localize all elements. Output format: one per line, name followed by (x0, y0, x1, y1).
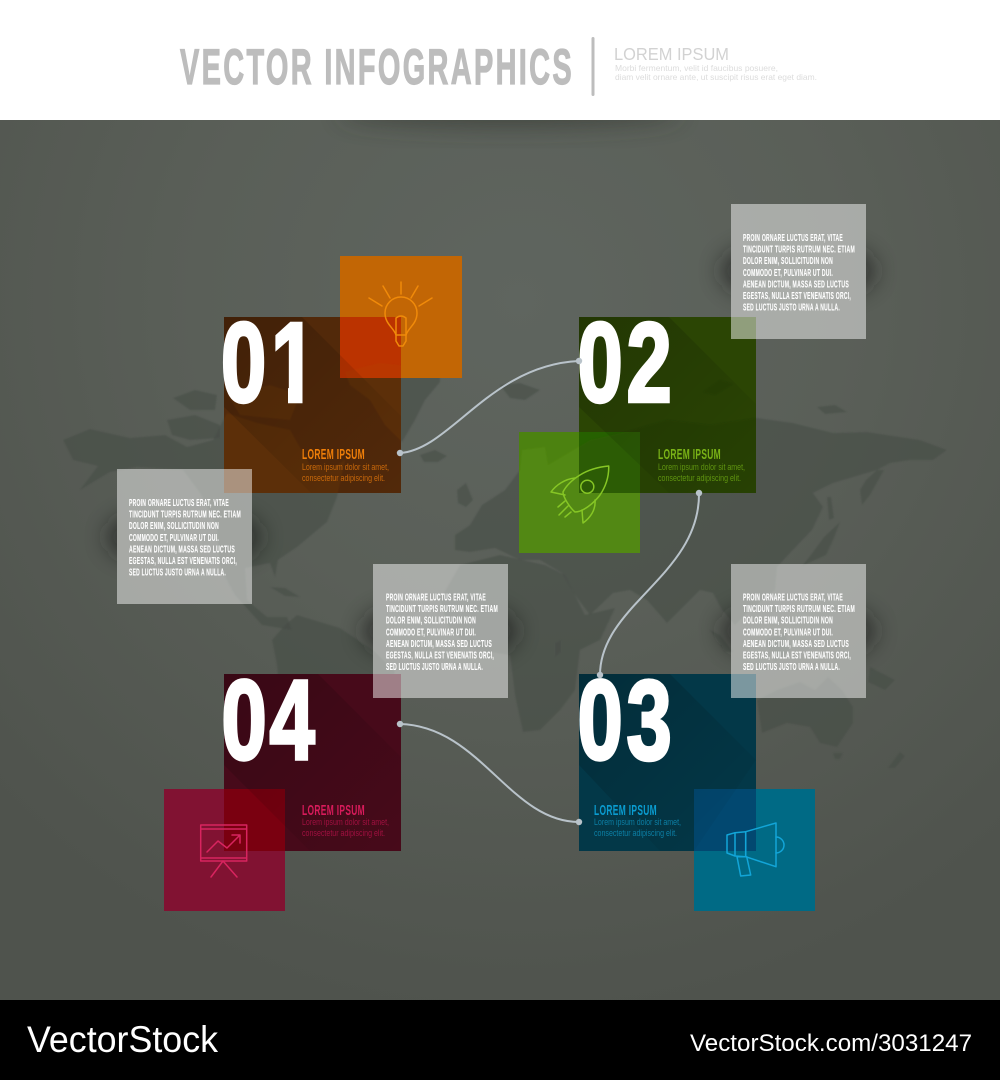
note box: left: PROIN ORNARE LUCTUS ERAT, VITAE (129, 498, 229, 509)
note box: lower right: TINCIDUNT TURPIS RUTRUM NEC. ETIAM (743, 604, 855, 615)
note box: top right: TINCIDUNT TURPIS RUTRUM NEC. ETIAM (743, 245, 855, 256)
note box: top right: DOLOR ENIM, SOLLICITUDIN NON (743, 256, 833, 267)
text 03: Lorem ipsum dolor sit amet, (594, 817, 681, 827)
note box: left (117, 469, 252, 604)
note box: left: SED LUCTUS JUSTO URNA A NULLA. (129, 568, 226, 579)
note box: left: EGESTAS, NULLA EST VENENATIS ORCI, (129, 556, 237, 567)
note box: lower right: PROIN ORNARE LUCTUS ERAT, VITAE (743, 592, 843, 604)
title: VECTOR INFOGRAPHICS (180, 39, 574, 95)
note box: center: EGESTAS, NULLA EST VENENATIS ORCI, (386, 650, 494, 662)
panel: step 03 (578, 657, 815, 911)
note box: lower right: SED LUCTUS JUSTO URNA A NULLA. (743, 662, 840, 673)
world map (63, 363, 947, 800)
note box: top right: AENEAN DICTUM, MASSA SED LUCTUS (743, 279, 849, 290)
text 01 (302, 462, 389, 483)
note box: lower right: COMMODO ET, PULVINAR UT DUI. (743, 627, 833, 638)
icon: presentation chart (201, 825, 247, 877)
note box: left: COMMODO ET, PULVINAR UT DUI. (129, 533, 219, 544)
text 02: Lorem ipsum dolor sit amet, (658, 462, 745, 472)
number 01: 01 (221, 299, 321, 426)
panel: step 04 (164, 657, 401, 911)
note box: lower right: AENEAN DICTUM, MASSA SED LUCTUS (743, 639, 849, 650)
note box: center: COMMODO ET, PULVINAR UT DUI. (386, 627, 476, 638)
panel: step 01 (222, 256, 462, 493)
note box: center: DOLOR ENIM, SOLLICITUDIN NON (386, 616, 476, 627)
connector: 02 to 03 (597, 490, 702, 678)
text 04 (302, 817, 389, 838)
panel: step 02 (519, 317, 756, 553)
note box: top right: EGESTAS, NULLA EST VENENATIS ORCI, (743, 291, 851, 302)
header subtitle: LOREM IPSUM (614, 44, 729, 64)
icon: rocket (551, 466, 609, 523)
text 01: consectetur adipiscing elit. (302, 473, 385, 483)
text 03 (594, 817, 681, 838)
text 01: Lorem ipsum dolor sit amet, (302, 462, 389, 472)
header description (615, 63, 817, 82)
note box: center: PROIN ORNARE LUCTUS ERAT, VITAE (386, 592, 486, 604)
note box: top right (731, 204, 866, 339)
note box: lower right: EGESTAS, NULLA EST VENENATIS ORCI, (743, 650, 851, 662)
note box: center: TINCIDUNT TURPIS RUTRUM NEC. ETIAM (386, 604, 498, 615)
heading 03: LOREM IPSUM (594, 802, 657, 819)
text 04: Lorem ipsum dolor sit amet, (302, 817, 389, 827)
text 03: consectetur adipiscing elit. (594, 828, 677, 838)
note box: lower right: DOLOR ENIM, SOLLICITUDIN NON (743, 616, 833, 627)
note box: left: AENEAN DICTUM, MASSA SED LUCTUS (129, 544, 235, 555)
icon: megaphone (727, 823, 784, 876)
footer image id: VectorStock.com/3031247 (690, 1030, 972, 1057)
header description: Morbi fermentum, velit id faucibus posuere, (615, 63, 778, 73)
heading 01: LOREM IPSUM (302, 446, 365, 463)
heading 04: LOREM IPSUM (302, 802, 365, 819)
note box: center: AENEAN DICTUM, MASSA SED LUCTUS (386, 639, 492, 650)
icon: light bulb (369, 282, 432, 346)
note box: top right: COMMODO ET, PULVINAR UT DUI. (743, 268, 833, 279)
connector: 01 to 02 (397, 358, 582, 456)
footer brand: VectorStock (27, 1019, 218, 1060)
header band (0, 0, 1000, 120)
note box: center (373, 564, 508, 698)
header divider (592, 37, 594, 96)
text 02 (658, 462, 745, 483)
number 02: 02 (578, 299, 676, 426)
note box: left: TINCIDUNT TURPIS RUTRUM NEC. ETIAM (129, 510, 241, 521)
number 04: 04 (222, 657, 318, 783)
heading 02: LOREM IPSUM (658, 446, 721, 463)
shadows behind note boxes (108, 98, 874, 659)
header description: diam velit ornare ante, ut suscipit risus erat eget diam. (615, 72, 817, 82)
note box: left: DOLOR ENIM, SOLLICITUDIN NON (129, 521, 219, 532)
text 02: consectetur adipiscing elit. (658, 473, 741, 483)
footer bar (0, 1000, 1000, 1080)
connector: 04 to 03 (397, 721, 582, 825)
note box: lower right (731, 564, 866, 698)
note box: top right: SED LUCTUS JUSTO URNA A NULLA. (743, 303, 840, 314)
text 04: consectetur adipiscing elit. (302, 828, 385, 838)
number 03: 03 (578, 657, 676, 783)
note box: center: SED LUCTUS JUSTO URNA A NULLA. (386, 662, 483, 673)
note box: top right: PROIN ORNARE LUCTUS ERAT, VITAE (743, 233, 843, 244)
